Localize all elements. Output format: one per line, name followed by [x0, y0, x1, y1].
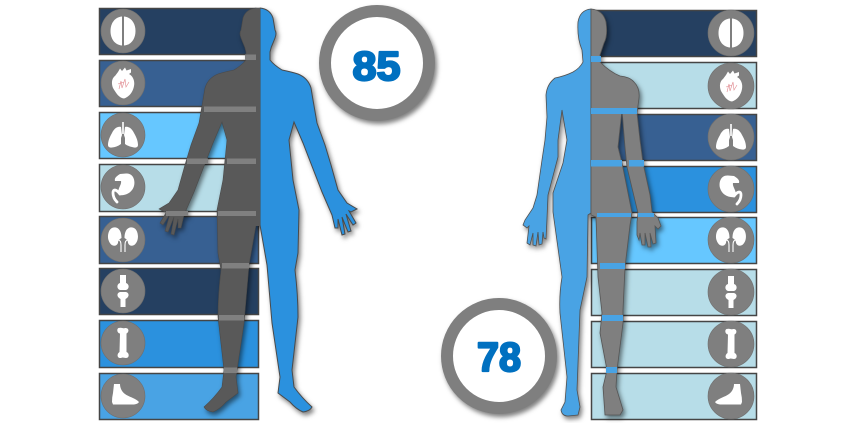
male grey level bands: [166, 54, 256, 373]
female right half, grey: [591, 9, 661, 415]
bar: lungs, female: [592, 114, 756, 160]
bar: feet, male: [100, 374, 258, 420]
bar: brain, female: [592, 10, 756, 56]
score ring: male 85: [325, 11, 429, 115]
bar: heart, male: [100, 60, 258, 106]
bar: feet, female: [592, 374, 756, 420]
bar: stomach, male: [100, 164, 258, 212]
bar: stomach, female: [592, 166, 756, 212]
icon: kidneys, male: [101, 218, 145, 262]
icon: stomach, female: [708, 166, 754, 212]
bar: brain, male: [100, 8, 258, 54]
bar: joints, male: [100, 268, 258, 314]
icon: bone, female: [708, 321, 754, 367]
male icons: [101, 9, 145, 418]
icon: stomach, male: [101, 165, 145, 209]
bar: lungs, male: [100, 112, 258, 158]
female blue level bands: [591, 56, 654, 373]
female body silhouette: [523, 9, 661, 416]
male right half, blue: [260, 8, 357, 412]
bar: joints, female: [592, 270, 756, 316]
bar: bones, female: [592, 322, 756, 368]
female icons: [708, 10, 754, 419]
icon: knee joint, male: [101, 269, 145, 313]
bar: bones, male: [100, 320, 258, 368]
icon: knee joint, female: [708, 269, 754, 315]
panel: male bars: [100, 8, 258, 420]
bar: kidneys, male: [100, 216, 258, 264]
icon: foot, male: [101, 374, 145, 418]
bar: kidneys, female: [592, 218, 756, 264]
female left half, blue: [523, 9, 591, 416]
ring: [325, 11, 429, 115]
icon: bone, male: [101, 321, 145, 365]
icon: foot, female: [708, 373, 754, 419]
icon: brain, female: [708, 10, 754, 56]
ring: [447, 304, 551, 408]
icon: lungs, female: [708, 114, 754, 160]
icon: kidneys, female: [708, 217, 754, 263]
icon: heart, female: [708, 63, 754, 109]
male body silhouette: [159, 8, 357, 412]
icon: brain, male: [101, 9, 145, 53]
number 85: 85: [352, 43, 400, 89]
icon: heart, male: [101, 61, 145, 105]
score ring: female 78: [447, 304, 551, 408]
panel: female bars: [592, 10, 756, 420]
male left half, dark grey: [159, 8, 260, 412]
bar: heart, female: [592, 62, 756, 108]
icon: lungs, male: [101, 113, 145, 157]
number 78: 78: [477, 334, 521, 380]
